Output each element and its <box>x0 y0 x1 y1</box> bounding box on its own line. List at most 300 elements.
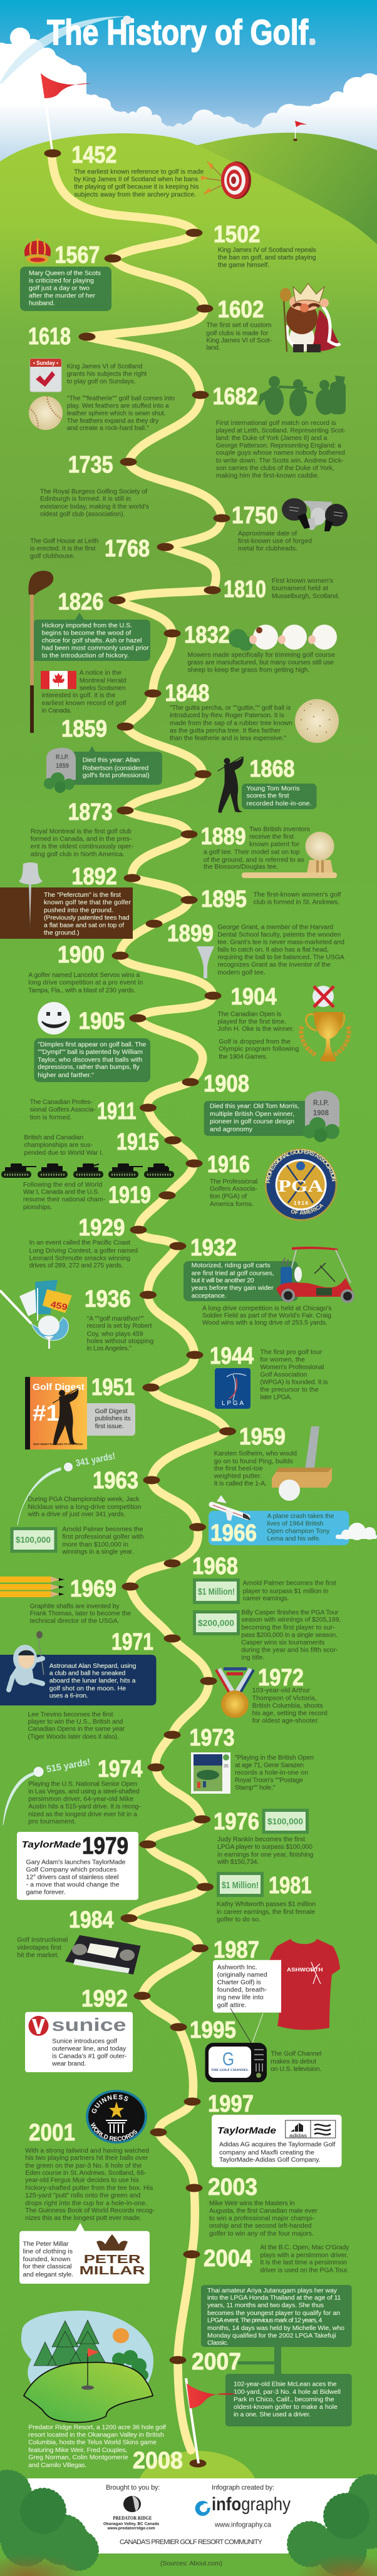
icon: driver, ball and flags with 459 <box>0 1280 72 1349</box>
text 1992: is Canada's #1 golf outer- <box>52 2053 127 2060</box>
icon: Sunday calendar <box>30 359 61 392</box>
text: Chicago long drive: Wood wins with a long drive of 253.5 yards. <box>202 1319 328 1327</box>
text 1915: British and Canadian <box>24 1134 83 1142</box>
text 1936: "A ""golf marathon"" <box>87 1315 144 1322</box>
text 1567: after the murder of her <box>29 292 95 299</box>
text 1452: subjects away from their archery practice. <box>74 191 196 198</box>
text: Canada notice: A notice in the <box>80 669 121 677</box>
text: Peter Millar: line of clothing is <box>23 2247 73 2255</box>
text 2003: onship and the second left-handed <box>209 2222 312 2230</box>
text 1868: scores the first <box>247 792 289 800</box>
text 1905: depressions, rather than bumps, fly <box>38 1063 140 1071</box>
text 1452: by King James II of Scotland when he bans <box>74 176 198 183</box>
trees: bottom left <box>0 2471 97 2576</box>
text 1502 <box>218 246 316 269</box>
text 1971 <box>49 1662 136 1700</box>
text 1973: "Playing in the British Open <box>235 1754 314 1762</box>
text 1915 <box>24 1134 103 1157</box>
event 1992: 1992 <box>81 1986 128 2012</box>
text: Peter Millar: for their classical <box>23 2263 71 2271</box>
panel: Ashworth <box>213 1960 281 2013</box>
event 1682 <box>213 376 346 479</box>
text 2008 <box>28 2424 166 2469</box>
event 1452 <box>71 142 251 199</box>
text: Peter Millar: founded, known <box>23 2256 71 2263</box>
text 1810: Musselburgh, Scotland. <box>272 592 339 600</box>
event 1810: 1810 <box>224 576 266 603</box>
event 1750 <box>232 498 348 553</box>
text 1768 <box>30 538 99 560</box>
icon: postage stamp <box>191 1752 230 1794</box>
text: Canada notice: interested in golf. It is the <box>42 692 115 699</box>
icon: Sunday calendar: • Sunday • <box>33 360 58 366</box>
logo: Predator Ridge: www.predatorridge.com <box>107 2526 155 2531</box>
icon: PGA logo: OF AMERICA <box>291 1204 324 1215</box>
text 1735: existance today, making it the world's <box>40 503 149 511</box>
text 1899: modern golf tee. <box>217 969 266 976</box>
icon: ball on flat tee <box>242 832 337 878</box>
text 1972: 103-year-old Arthur <box>252 1687 311 1694</box>
text 1904: Golf is dropped from the <box>219 1038 291 1045</box>
text 1768: The Golf House at Leith <box>30 538 99 545</box>
text: Lee Trevino: Canadian Opens in the same year <box>28 1725 125 1733</box>
text 1979: game forever. <box>26 1889 65 1896</box>
text 1972 <box>252 1687 328 1725</box>
event 1959 <box>214 1424 332 1501</box>
text: Palmer $100,000 <box>61 1526 144 1556</box>
text 2003 <box>209 2199 318 2237</box>
text 1995: on U.S. television. <box>271 2065 321 2073</box>
text 1900: Tampa, Fla., with a blast of 230 yards. <box>28 986 135 994</box>
text 1963 <box>28 1495 142 1518</box>
icon: king with golf club <box>280 284 340 352</box>
text 1944: later LPGA. <box>260 1393 292 1401</box>
text 2001: With a strong tailwind and having watched <box>25 2147 149 2154</box>
text: Chicago long drive: A long drive competition is held at Chicago's <box>202 1304 332 1312</box>
text 1944: Women's Professional <box>260 1363 324 1371</box>
text 1826: Hickory imported from the U.S. <box>42 621 132 629</box>
text 2001: Eden course in St. Andrews, Scotland, 66- <box>25 2169 147 2177</box>
text: featherie <box>67 395 175 432</box>
icon: plane <box>212 1495 250 1521</box>
text 1916: tion (PGA) of <box>210 1193 247 1200</box>
text 1966 <box>267 1513 334 1543</box>
text: featherie: and create a rock-hard ball." <box>67 424 149 432</box>
event 1972: 1972 <box>258 1665 304 1691</box>
logo: Sunice: sunice <box>51 2015 127 2035</box>
event 1895 <box>201 886 341 912</box>
text 1602: King James VI of Scot- <box>206 337 272 344</box>
text 1974: Austin hits a 515-yard drive. It is recog- <box>28 1802 141 1810</box>
text: Palmer $1 million: career earnings. <box>243 1595 289 1602</box>
event 1452: 1452 <box>71 142 116 168</box>
text 1929: drives of 289, 272 and 275 yards. <box>29 1262 123 1269</box>
event 1916 <box>207 1148 338 1221</box>
text 2008: and Camilo Villegas. <box>28 2461 86 2469</box>
text 1919: Following the end of World <box>23 1181 102 1188</box>
text 1832: grass are manufactured, but many courses still use <box>188 659 334 667</box>
icon: Guinness World Records logo: GUINNESS <box>91 2094 128 2113</box>
icon: $200,000 bill <box>193 1610 240 1635</box>
text 1951 <box>95 1408 131 1430</box>
event 1826: 1826 <box>58 589 104 615</box>
text 1936: holes without stopping <box>87 1337 153 1345</box>
event: Canada notice <box>41 669 127 714</box>
event 1892 <box>0 862 133 939</box>
logo: Predator Ridge: Okanagan Valley, BC Canada <box>103 2522 159 2526</box>
text 1873 <box>31 827 133 858</box>
text: Casper: season with winnings of $205,169, <box>241 1616 341 1623</box>
event 1968 <box>192 1553 341 1661</box>
text 1971: Astronaut Alan Shepard, using <box>49 1662 136 1670</box>
text 1848 <box>170 704 292 742</box>
text 2001: hickory-shafted putter from the tee box. His <box>25 2184 153 2192</box>
event 1618: 1618 <box>28 324 71 350</box>
text 1916: Golfers Associa- <box>210 1185 257 1193</box>
text 1969: Frank Thomas, later to become the <box>30 1610 131 1617</box>
text 1959: weighted putter. <box>214 1473 262 1480</box>
text 2003: Augusta, the first Canadian male ever <box>209 2207 318 2214</box>
text 1971: a club and ball he sneaked <box>49 1670 126 1677</box>
event 1974: 1974 <box>98 1756 143 1782</box>
text 1971: golf shot on the moon. He <box>49 1685 126 1692</box>
text: Palmer $100,000: Arnold Palmer becomes the <box>62 1526 143 1533</box>
event 1859: 1859 <box>61 716 107 742</box>
text 1966: Open champion Tony <box>267 1527 330 1535</box>
text 1602 <box>206 322 272 352</box>
text 2003: Mike Weir wins the Masters in <box>209 2199 295 2207</box>
panel: TaylorMade <box>17 1832 138 1900</box>
text 1929: In an event called the Pacific Coast <box>29 1239 130 1247</box>
event 1602: 1602 <box>218 297 264 323</box>
text 1916 <box>210 1178 257 1208</box>
text 1682: played at Leith, Scotland. Representing Scot- <box>216 427 346 434</box>
icon: gravestone 1908: R.I.P. <box>313 1098 329 1107</box>
panel: Young Tom Morris <box>242 784 317 809</box>
text 1997 <box>219 2141 335 2164</box>
text 1932: years before they gain wider <box>192 1284 274 1292</box>
icon: $100,000 bill: $100,000 <box>16 1535 51 1545</box>
event 1981: 1981 <box>269 1873 312 1899</box>
text 1892: known golf tee that the golfer <box>44 899 132 906</box>
text 1932: are first tried at golf courses, <box>192 1269 274 1277</box>
event 1859 <box>44 716 162 793</box>
text 1810 <box>272 577 339 600</box>
text 1750: first-known use of forged <box>238 538 312 545</box>
text 1868 <box>247 785 312 807</box>
text 1915: pended due to World War I. <box>24 1149 103 1157</box>
event 1889: 1889 <box>201 824 246 850</box>
icon: golfer silhouettes <box>259 376 346 416</box>
event 1905 <box>34 1002 150 1082</box>
text: Casper: pass $200,000 in a single season. <box>241 1631 338 1638</box>
text 1682: son carries the clubs of the Duke of York, <box>216 464 334 472</box>
text 1974: pro tournament. <box>28 1818 76 1826</box>
text 1905: Taylor, who discovers that balls with <box>38 1056 142 1063</box>
connector between panels <box>238 2347 281 2374</box>
icon: Golf Digest cover <box>25 1377 87 1449</box>
text 1919: pionships. <box>23 1204 52 1211</box>
text 1899: tee. Grant's tee is never mass-marketed and <box>217 939 344 946</box>
text 1750: metal for clubheads. <box>238 545 297 553</box>
text 1826 <box>42 621 149 660</box>
event 2004 <box>204 2244 349 2274</box>
logo: TaylorMade: TaylorMade <box>21 1839 81 1850</box>
logo: Peter Millar <box>80 2234 145 2277</box>
event 1976 <box>214 1809 313 1866</box>
text 1987: Charter Golf) is <box>217 1978 261 1986</box>
text 1899: Dental School faculty, patents the wooden <box>217 931 341 939</box>
text 1966: Lema and his wife. <box>267 1535 321 1543</box>
text 1976: in earnings for one year, finishing <box>217 1851 313 1858</box>
event 1892: 1892 <box>71 864 117 890</box>
panel: footer credits <box>28 2478 362 2553</box>
text 1868: recorded hole-in-one. <box>247 800 312 807</box>
icon: crown <box>24 238 51 263</box>
event 1995: 1995 <box>190 2017 236 2043</box>
text 1682: George Patterson. Representing England: a <box>216 442 341 449</box>
text 2004: driver is used on the PGA Tour. <box>260 2266 349 2274</box>
text: Palmer $1 million: Arnold Palmer becomes the first <box>243 1580 336 1587</box>
event 1987: 1987 <box>214 1937 259 1963</box>
text 1959: the first heel-toe <box>214 1465 263 1473</box>
icon: smiley golf ball <box>38 1002 70 1035</box>
logo: Peter Millar: MILLAR <box>80 2264 145 2277</box>
text 1966: A plane crash takes the <box>267 1513 334 1520</box>
text 1848: introduced by Rev. Roger Paterson. It is <box>170 712 284 719</box>
event 2003: 2003 <box>208 2174 257 2200</box>
icon: Golf Channel TV: G <box>222 2049 234 2070</box>
text: featherie: "The ""featherie"" golf ball comes into <box>67 395 175 402</box>
text 1976: Judy Rankin becomes the first <box>217 1836 305 1843</box>
icon: Guinness World Records logo <box>86 2090 147 2144</box>
icon: ball flight 515 yards <box>3 1757 91 1825</box>
event 1969: 1969 <box>70 1576 116 1602</box>
icon: archery target <box>201 161 251 199</box>
event 1971 <box>0 1629 157 1740</box>
event 1873: 1873 <box>68 799 113 825</box>
text 1987: (originally named <box>217 1971 267 1978</box>
text 1905 <box>38 1041 146 1079</box>
event 1868 <box>218 756 317 813</box>
event 1981 <box>217 1872 316 1923</box>
text 1916: The Professional <box>210 1178 257 1185</box>
text 1682: making him the first-known caddie. <box>216 472 319 479</box>
event 1832: 1832 <box>184 622 230 648</box>
text 1889: known patent for <box>249 841 299 848</box>
text 1951: Golf Digest <box>95 1408 128 1415</box>
text 1992: Sunice introduces golf <box>52 2038 117 2045</box>
event 1944 <box>210 1343 328 1409</box>
event 1502 <box>214 222 316 269</box>
panel: Elsie McLean <box>225 2374 352 2426</box>
text 1992: outerwear line, and today <box>52 2045 127 2052</box>
text 1963: During PGA Championship week, Jack <box>28 1495 140 1503</box>
text 1889: Two British inventors <box>249 825 310 833</box>
panel: TaylorMade-Adidas <box>212 2115 342 2167</box>
text 1899: requiring the ball to be balanced. The USGA <box>217 954 344 961</box>
text 1868: Young Tom Morris <box>247 785 299 792</box>
text 1848: as the gutta percha tree. It flies farther <box>170 727 281 734</box>
text 1567: golf just a day or two <box>29 285 90 292</box>
text 1682: First international golf match on record is <box>216 419 336 427</box>
logo: Sunice <box>29 2015 127 2036</box>
text: Lee Trevino: Lee Trevino becomes the first <box>28 1710 113 1718</box>
text: Elsie McLean: Park in Chico, Calif., becoming the <box>234 2396 334 2403</box>
text 1929: Long Driving Contest, a golfer named <box>29 1247 138 1254</box>
icon: Canadian flag <box>41 671 76 689</box>
icon: small distant flag <box>293 121 307 141</box>
icon: Golf Channel TV <box>205 2008 267 2082</box>
text 1981: golfer to do so. <box>217 1916 261 1923</box>
text 2004 <box>260 2244 349 2274</box>
text 1972: British Columbia, shoots <box>252 1702 323 1709</box>
logo: adidas and Maxfli: adidas <box>289 2133 307 2139</box>
text 1973: Royal Troon's ""Postage <box>235 1777 303 1784</box>
text: featherie: play. Wet feathers are stuffed into a <box>67 402 169 410</box>
text 1602: The first set of custom <box>206 322 272 329</box>
event 1984: 1984 <box>69 1907 114 1933</box>
text 1987: founded, breath- <box>217 1986 267 1994</box>
text 1987 <box>217 1963 267 2009</box>
text 1602: land. <box>206 344 220 352</box>
text 1911: sional Golfers Associa- <box>30 1106 96 1113</box>
text 1976: LPGA player to surpass $100,000 <box>217 1843 312 1851</box>
event 1826 <box>29 571 150 733</box>
trees: bottom right <box>289 2476 377 2576</box>
event 2007 <box>192 2285 352 2426</box>
text 1908: pioneer in golf course design <box>210 1118 294 1125</box>
text: Casper: during the year and his fifth scor- <box>241 1647 338 1654</box>
event 1979 <box>17 1832 138 1900</box>
event 1936: 1936 <box>85 1286 131 1312</box>
icon: shrub and sheep <box>229 625 337 651</box>
text 1810: tournament held at <box>272 585 328 592</box>
text 1911 <box>30 1098 96 1121</box>
event 1502: 1502 <box>214 222 261 248</box>
event 1959: 1959 <box>239 1424 286 1450</box>
text 1944: The first pro golf tour <box>260 1349 323 1356</box>
clouds <box>0 28 377 188</box>
event 1951: 1951 <box>91 1374 135 1401</box>
event 1889 <box>201 824 337 878</box>
holes along path <box>44 149 236 2467</box>
text: Canada notice: in Canada. <box>42 707 71 714</box>
icon: ball flight 341 yards: 341 yards! <box>75 1451 116 1469</box>
text 1929 <box>29 1239 138 1269</box>
event 1919: 1919 <box>108 1182 151 1209</box>
text 1976: with $150,734. <box>217 1858 259 1866</box>
text 1973: Stamp"" hole." <box>235 1784 276 1792</box>
logo: Peter Millar: PETER <box>84 2253 141 2266</box>
text 1892: The "Peferctum" is the first <box>44 891 121 899</box>
text 1979: Gary Adam's launches TaylorMade <box>26 1859 126 1866</box>
text 1992 <box>51 2038 127 2067</box>
text 1832: Mowers made specifically for trimming golf course <box>188 652 335 659</box>
panel: moon shot <box>0 1655 157 1705</box>
text 1979: - a move that would change the <box>26 1881 120 1889</box>
logo: adidas and Maxfli <box>286 2120 336 2139</box>
event 1929 <box>29 1215 138 1269</box>
text: Elsie McLean: 100-yard, par-3 No. 4 hole at Bidwell <box>234 2388 341 2396</box>
text 1995: The Golf Channel <box>271 2050 321 2058</box>
text 1959 <box>214 1450 297 1488</box>
text 1602: golf clubs is made for <box>206 329 269 337</box>
text 1682 <box>216 419 346 479</box>
text 1859: golf's first professional) <box>83 772 150 779</box>
text 1979 <box>26 1859 126 1896</box>
panel: Ariya Jutanugarn <box>201 2285 352 2347</box>
text 1889: receive the first <box>249 833 294 841</box>
event 1966 <box>209 1495 377 1546</box>
event 2003 <box>208 2174 318 2237</box>
text 1892: (Previously patented tees had <box>44 914 130 921</box>
text 1900 <box>28 971 143 994</box>
event 1602 <box>206 284 340 352</box>
text 1944: for women, the <box>260 1356 305 1363</box>
event 1899 <box>167 921 344 978</box>
text 1974: Playing the U.S. National Senior Open <box>28 1780 137 1787</box>
text 1987: ing new life into <box>217 1994 264 2001</box>
panel: Old Tom Morris <box>204 1101 311 1136</box>
text 1973: records a hole-in-one on <box>235 1769 308 1777</box>
event 1908: 1908 <box>204 1071 249 1097</box>
text: Palmer $100,000: first professional golfer with <box>62 1533 144 1540</box>
text: Lee Trevino: player to win the U.S., British and <box>28 1718 123 1725</box>
icon: graphite pencils <box>0 1577 65 1597</box>
icon: final red flag <box>186 2378 237 2463</box>
text 2008: Greg Norman, Colin Montgomerie <box>28 2454 128 2461</box>
text: Casper: Billy Casper finishes the PGA Tour <box>241 1608 339 1616</box>
text 1966: lives of 1964 British <box>267 1520 324 1527</box>
text: Palmer $1 million: player to surpass $1 million in <box>243 1587 329 1595</box>
icon: gravestone 1859: R.I.P. <box>56 754 69 761</box>
event 1969 <box>0 1576 131 1625</box>
event 1899: 1899 <box>167 921 214 947</box>
icon: $100,000 bill: $100,000 <box>267 1816 303 1826</box>
text 1904: John H. Oke is the winner. <box>217 1025 294 1033</box>
text 1899 <box>217 923 344 976</box>
text 1889 <box>204 825 310 871</box>
icon: heel-toe putter <box>272 1426 332 1501</box>
text 1832: sheep to keep the grass from getting high. <box>188 666 309 673</box>
event 1567: 1567 <box>55 242 100 268</box>
icon: VHS tape <box>65 1935 141 1975</box>
text 1951: publishes its <box>95 1415 131 1423</box>
text: Elsie McLean <box>234 2381 341 2418</box>
text: Peter Millar <box>23 2241 73 2278</box>
text: Elsie McLean: oldest-known golfer to make a hole <box>234 2403 338 2411</box>
icon: golfer silhouette <box>218 756 244 813</box>
text 1904 <box>217 1011 299 1060</box>
text 1826: choice for golf shafts. Ash or hazel <box>42 637 142 645</box>
event 1915 <box>24 1129 159 1157</box>
text: Sundays <box>67 363 147 385</box>
text 1826: begins to become the wood of <box>42 630 131 637</box>
icon: $1 Million bill: $1 Million! <box>198 1587 235 1597</box>
event 1868: 1868 <box>249 756 294 782</box>
text 1997: TaylorMade-Adidas Golf Company. <box>219 2156 321 2164</box>
text 1932 <box>192 1262 274 1299</box>
text 1997: company and Maxfli creating the <box>219 2149 314 2156</box>
icon: gravestone 1859 <box>44 748 76 793</box>
text 1567: is criticized for playing <box>29 277 94 285</box>
text: Palmer $100,000: more than $100,000 in <box>62 1541 128 1548</box>
text 1735 <box>40 488 149 518</box>
text: Ariya Jutanugarn: becomes the youngest player to qualify for an <box>207 2309 340 2317</box>
text: Palmer $100,000: winnings in a single year. <box>61 1548 133 1556</box>
text 1936 <box>87 1315 153 1352</box>
